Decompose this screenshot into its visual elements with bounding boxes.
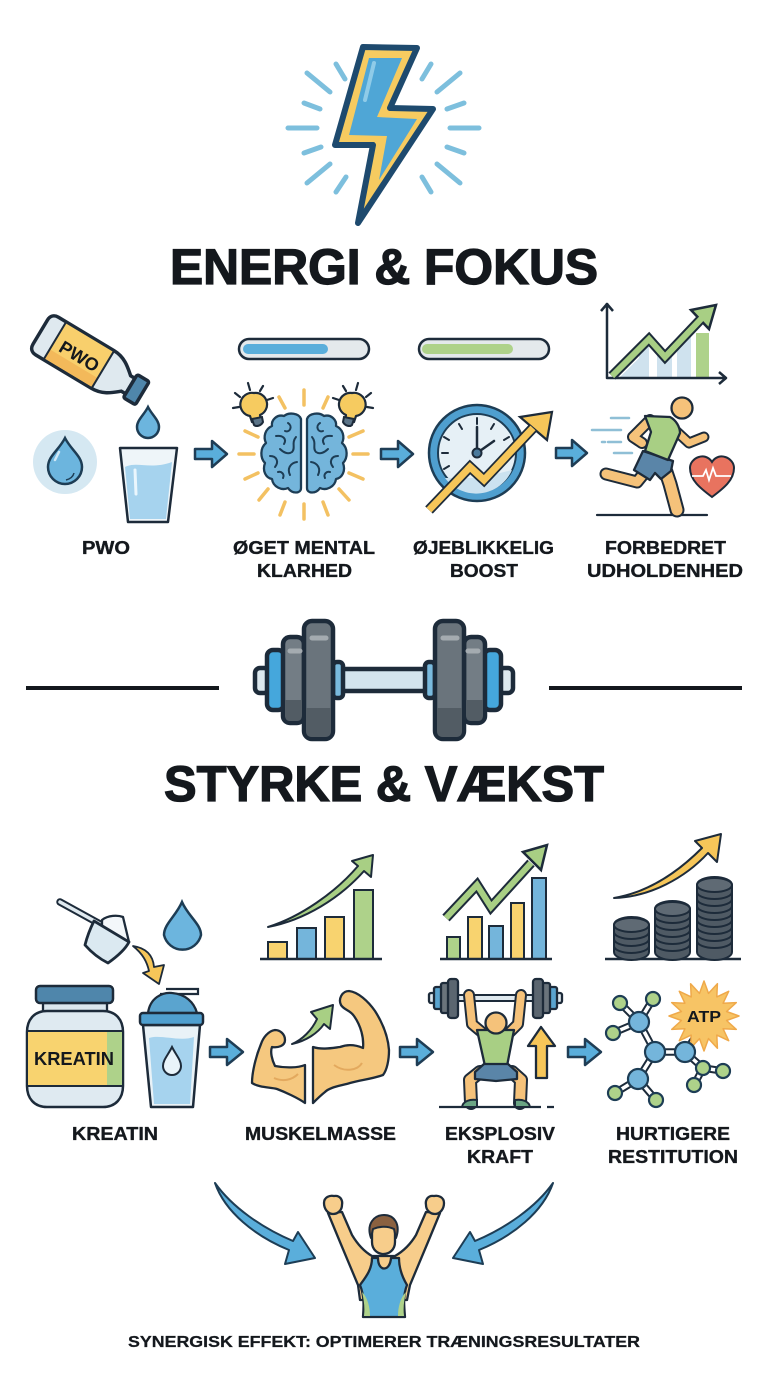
arrow: curved right arrow to athlete: [453, 1183, 553, 1264]
label: eksplosiv kraft: EKSPLOSIV: [445, 1124, 555, 1144]
progress bar: blue: [239, 339, 369, 359]
label: forbedret udholdenhed: [587, 538, 743, 581]
arrow: yellow curved arrow into shaker: [133, 946, 164, 984]
label: hurtigere restitution: HURTIGERE: [616, 1124, 730, 1144]
arrow: boost to endurance: [556, 440, 587, 466]
icon: runner with heart: [592, 398, 734, 515]
icon: victorious athlete: [324, 1196, 444, 1317]
label: kreatin: KREATIN: [72, 1124, 158, 1144]
label: oeget mental klarhed: KLARHED: [257, 561, 352, 581]
chart: rising line chart: [601, 303, 726, 384]
title: styrke og vaekst: STYRKE & VÆKST: [164, 756, 604, 812]
label: eksplosiv kraft: KRAFT: [467, 1147, 533, 1167]
label: eksplosiv kraft: [445, 1124, 555, 1167]
label: oejeblikkelig boost: BOOST: [450, 561, 518, 581]
icon: falling drop: [137, 407, 159, 438]
icon: water drop: [164, 902, 201, 950]
arrow: mental clarity to boost: [381, 441, 413, 467]
label: hurtigere restitution: RESTITUTION: [608, 1147, 738, 1167]
arrow: kreatin to muscle: [210, 1039, 243, 1065]
label: oeget mental klarhed: [233, 538, 375, 581]
arrow: power to restitution: [568, 1039, 601, 1065]
label: oejeblikkelig boost: ØJEBLIKKELIG: [413, 538, 554, 558]
arrow: PWO to mental clarity: [195, 441, 227, 467]
chart: bars with zigzag arrow: [440, 845, 552, 959]
icon: glass of water: [120, 448, 177, 522]
divider right: [549, 686, 742, 690]
icon: scoop with powder: [60, 902, 129, 963]
label: oejeblikkelig boost: [413, 538, 554, 581]
icon: dumbbell: [255, 621, 513, 739]
label: forbedret udholdenhed: UDHOLDENHED: [587, 561, 743, 581]
icon: shaker bottle: [140, 989, 203, 1107]
icon: kreatin jar: KREATIN: [34, 1049, 114, 1069]
progress bar: green: [419, 339, 549, 359]
icon: PWO bottle pouring: [29, 313, 154, 412]
icon: PWO bottle pouring: PWO: [56, 337, 103, 376]
arrow: muscle to power: [400, 1039, 433, 1065]
icon: water drop in circle: [33, 430, 97, 494]
label: muskelmasse: MUSKELMASSE: [245, 1124, 396, 1144]
label: forbedret udholdenhed: FORBEDRET: [605, 538, 726, 558]
label: hurtigere restitution: [608, 1124, 738, 1167]
arrow: curved left arrow to athlete: [215, 1183, 315, 1264]
icon: brain with light bulbs: [233, 383, 373, 519]
arrow: yellow upward arrow: [528, 1027, 555, 1078]
icon: molecule with ATP burst: ATP: [687, 1009, 721, 1026]
icon: lightning bolt with rays: [288, 47, 479, 223]
caption: synergistic effect: SYNERGISK EFFEKT: OPTIMERER TRÆNINGSRESULTATER: [128, 1334, 640, 1351]
icon: kreatin jar: [27, 986, 123, 1107]
chart: rising bars with curved arrow: [260, 855, 382, 959]
chart: coin stacks with arrow: [605, 834, 741, 960]
divider left: [26, 686, 219, 690]
icon: weightlifter: [429, 979, 562, 1107]
icon: flexed arms, small and large: [252, 991, 389, 1103]
icon: molecule with ATP burst: [606, 981, 739, 1107]
title: energi og fokus: ENERGI & FOKUS: [170, 239, 598, 295]
icon: clock with rising arrow: [429, 405, 552, 510]
label: oeget mental klarhed: ØGET MENTAL: [233, 538, 375, 558]
label: PWO: PWO: [82, 538, 130, 558]
